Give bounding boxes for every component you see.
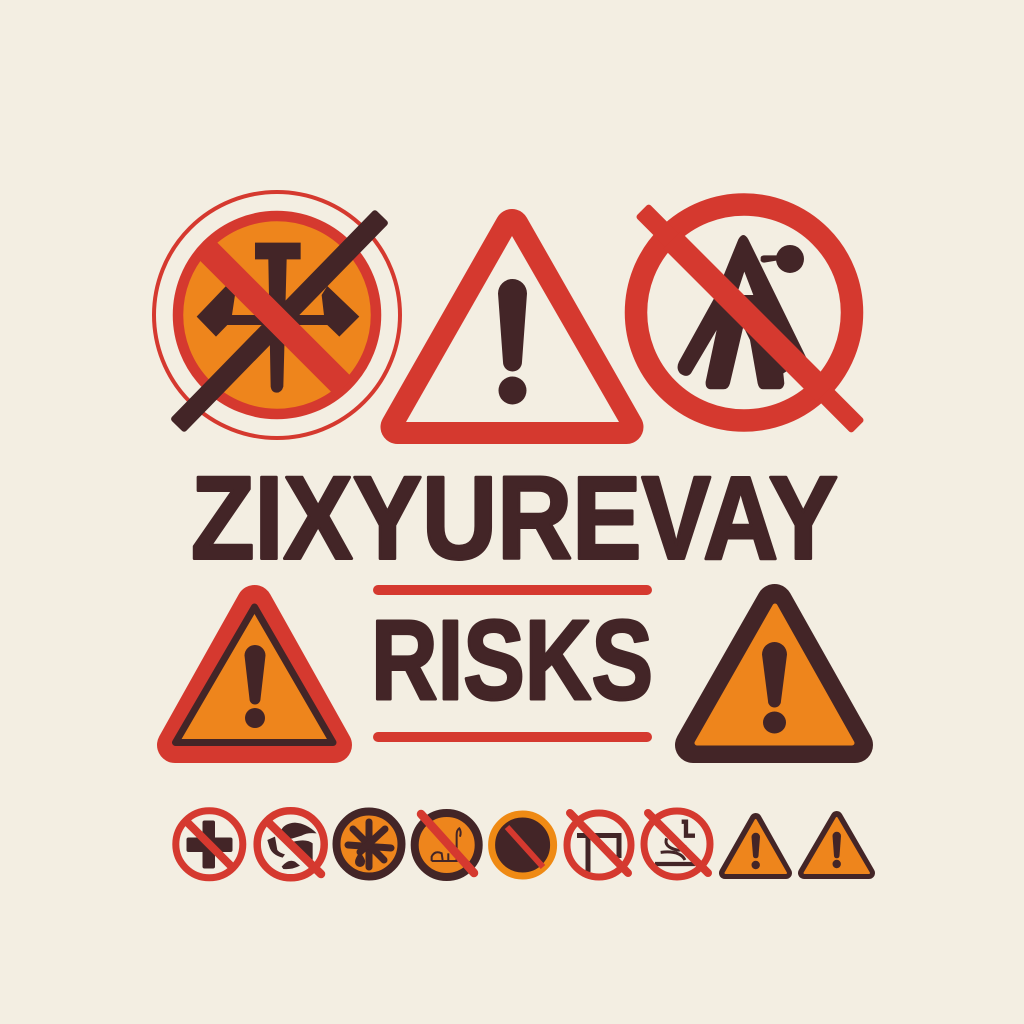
small icon: warning triangle two (804, 817, 869, 873)
title: ZIXYUREVAY (191, 452, 838, 584)
icon: red outline warning triangle (398, 226, 626, 427)
icon: red prohibition sign with figure (635, 203, 865, 434)
small icon: no machine (644, 811, 710, 877)
small icon: orange crossed sign (415, 813, 479, 877)
subtitle: RISKS (371, 597, 653, 723)
small icon: warning triangle one (725, 819, 786, 873)
icon: orange prohibition sign with double slash (154, 192, 400, 438)
small icon: no animal (257, 811, 324, 878)
bottom red divider (373, 732, 652, 742)
small icon: dark disc with orange ring (492, 814, 554, 876)
small icon: no cross (176, 811, 243, 878)
icon: right orange warning triangle with dark border (693, 602, 855, 745)
small icon: orange asterisk (336, 812, 402, 876)
small icon: no corner frame (567, 813, 631, 877)
icon: left orange warning triangle with red border (175, 603, 334, 745)
top red divider (373, 585, 652, 595)
small icon row (176, 811, 869, 878)
